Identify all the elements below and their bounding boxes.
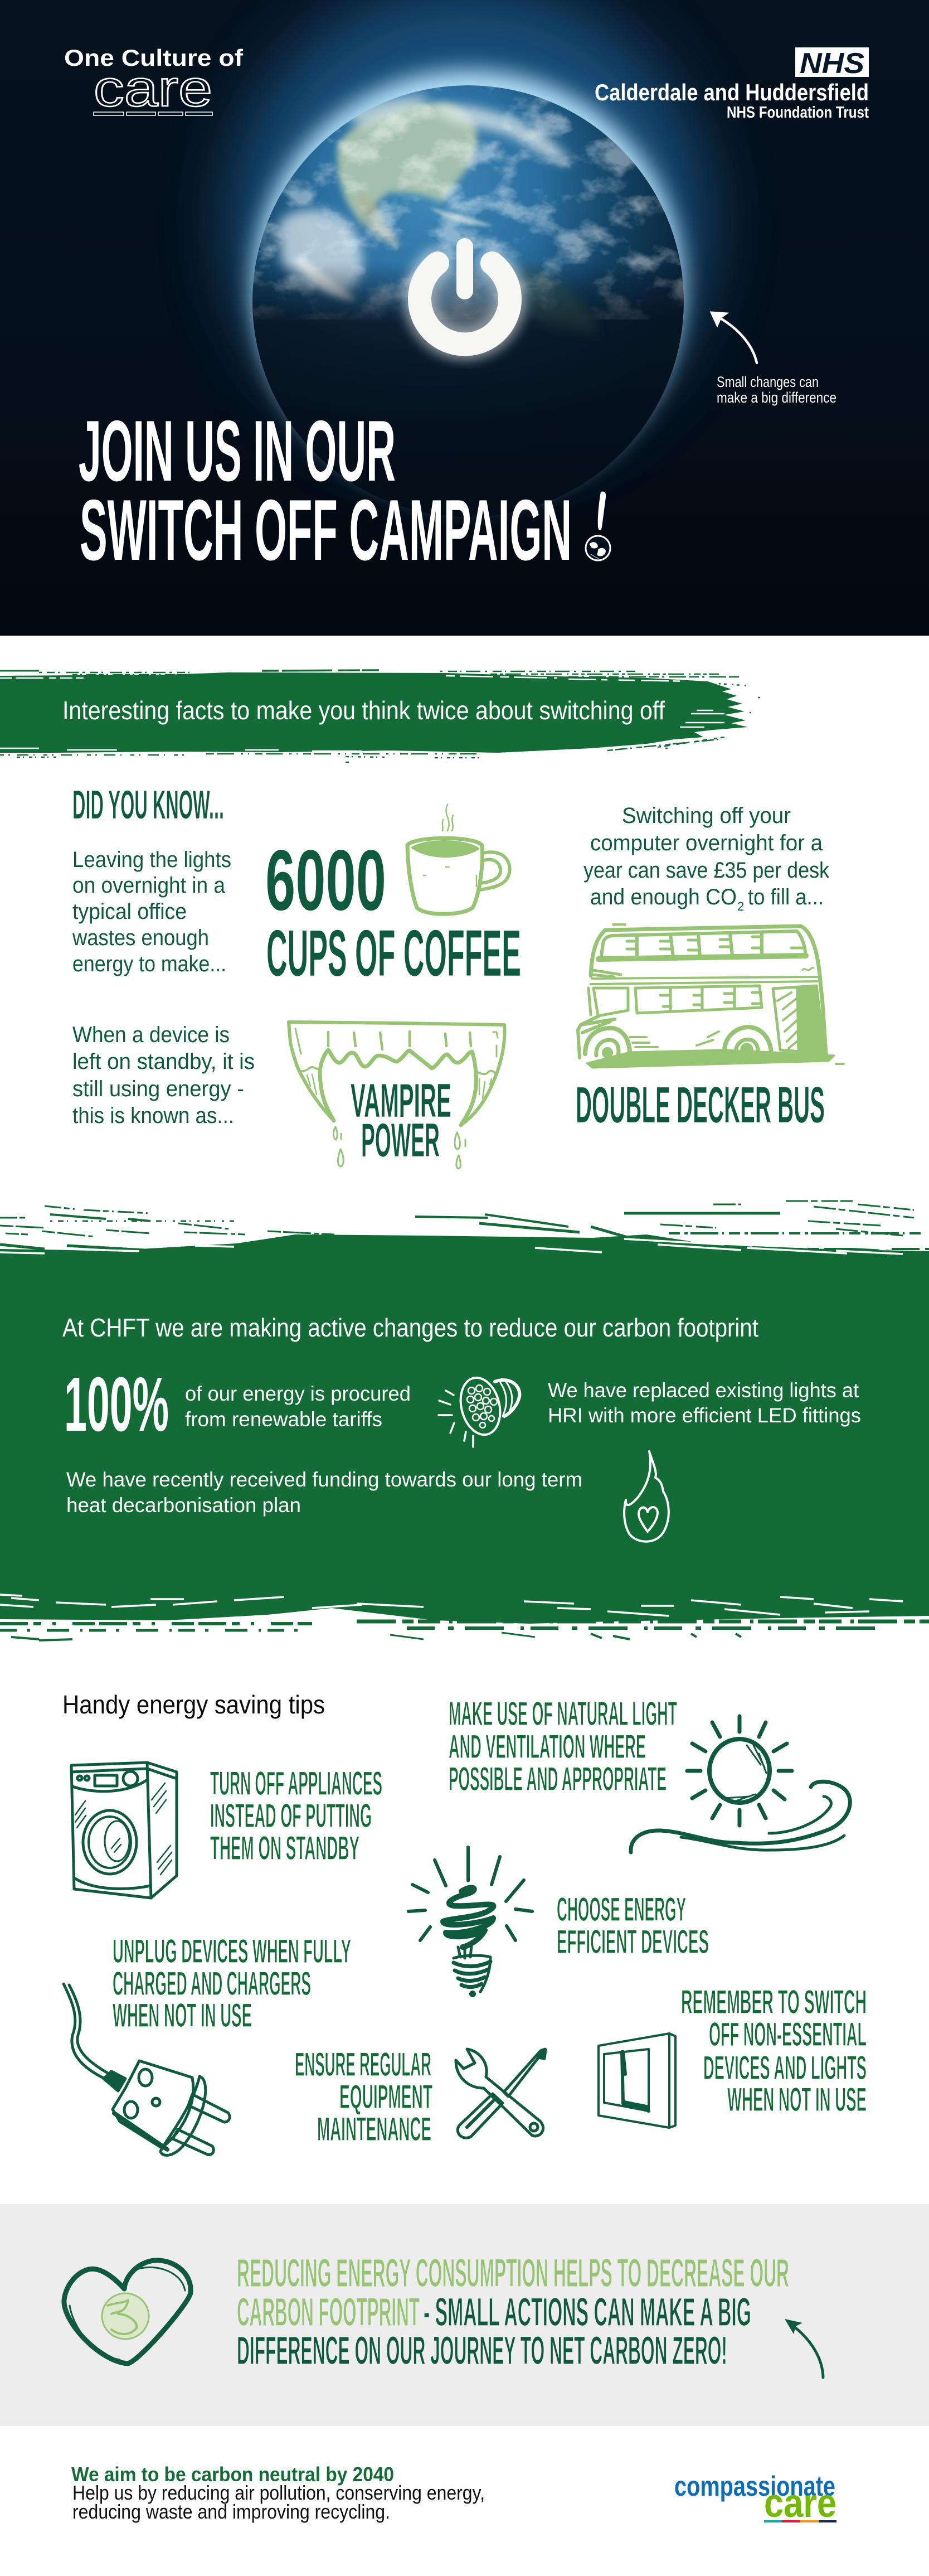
- icon: washing machine: [71, 1762, 177, 1898]
- icon: vampire fangs: [289, 1022, 504, 1169]
- stat: 6000: 6000: [265, 832, 386, 928]
- text: leaving lights: energy to make...: [72, 952, 226, 976]
- logo: NHS trust: [595, 47, 869, 122]
- arrow: small changes: [711, 312, 757, 363]
- title: JOIN US IN OUR: [79, 403, 396, 499]
- title: [79, 403, 610, 578]
- text: small changes: make a big difference: [717, 389, 836, 406]
- icon: double decker bus: [578, 924, 844, 1068]
- footer text: We aim to be carbon neutral by 2040: [71, 2463, 394, 2486]
- text: heat decarbonisation: We have recently received funding towards our long term: [66, 1468, 582, 1491]
- background haze: [228, 0, 708, 463]
- tip: maintenance: [295, 2046, 432, 2148]
- tip: energy efficient: [557, 1891, 709, 1960]
- text: leaving lights: typical office: [72, 899, 187, 924]
- footer text: [71, 2463, 485, 2523]
- brush strokes bottom: [0, 1621, 929, 1640]
- text: renewable tariffs: from renewable tariffs: [185, 1408, 382, 1431]
- tip: natural light: AND VENTILATION WHERE: [449, 1728, 646, 1765]
- heading: handy tips: Handy energy saving tips: [62, 1690, 325, 1719]
- logo: NHS trust: NHS Foundation Trust: [727, 104, 869, 122]
- text: ENSURE REGULAR: [295, 2046, 431, 2083]
- text: LED fittings: HRI with more efficient LED fittings: [548, 1404, 861, 1427]
- brush strokes top: [0, 1201, 929, 1250]
- icon: flame with heart: [624, 1451, 669, 1542]
- text: LED fittings: [548, 1379, 861, 1427]
- text: DID YOU KNOW...: [72, 783, 224, 827]
- text: standby: When a device is: [72, 1023, 230, 1047]
- text: standby: left on standby, it is: [72, 1049, 255, 1074]
- text: UNPLUG DEVICES WHEN FULLY: [113, 1933, 351, 1970]
- label: vampire power: [351, 1074, 451, 1167]
- logo: One Culture of care: One Culture of: [64, 45, 244, 71]
- text: leaving lights: wastes enough: [72, 926, 209, 950]
- heading: facts: Interesting facts to make you think twice about switching off: [62, 696, 665, 725]
- logo: NHS trust: Calderdale and Huddersfield: [595, 79, 869, 105]
- icon: heart with globe: [64, 2260, 191, 2364]
- text: leaving lights: [72, 848, 231, 976]
- text: standby: this is known as...: [72, 1103, 234, 1128]
- text: switching off: computer overnight for a: [590, 831, 823, 855]
- hero panel: [0, 0, 929, 636]
- text: switching off: [583, 803, 830, 913]
- label: vampire power: POWER: [361, 1114, 440, 1167]
- text: CUPS OF COFFEE: [266, 917, 521, 990]
- logo: compassionate care: compassionate: [674, 2471, 835, 2502]
- footer text: reducing waste and improving recycling.: [72, 2500, 390, 2523]
- earth globe: [245, 85, 691, 535]
- text: LED fittings: We have replaced existing lights at: [548, 1379, 859, 1402]
- icon: LED bulb: [439, 1373, 519, 1447]
- tip: natural light: [449, 1695, 677, 1798]
- text: switching off: Switching off your: [622, 803, 791, 828]
- tip: turn off appliances: THEM ON STANDBY: [210, 1829, 359, 1867]
- tip: energy efficient: CHOOSE ENERGY: [557, 1891, 686, 1928]
- cloud texture: [252, 85, 684, 319]
- text: leaving lights: on overnight in a: [72, 873, 226, 898]
- icon: light switch: [599, 2033, 675, 2128]
- text: leaving lights: Leaving the lights: [72, 848, 231, 872]
- logo: compassionate care: care: [764, 2481, 836, 2526]
- stat: 100%: 100%: [64, 1362, 169, 1447]
- text: standby: still using energy -: [72, 1077, 244, 1101]
- globe glow: [253, 70, 683, 501]
- icon: coffee cup: [407, 805, 510, 914]
- panel: CHFT active changes: [0, 1201, 929, 1640]
- tip: unplug: WHEN NOT IN USE: [113, 1997, 252, 2034]
- icon: energy saving bulb: [408, 1847, 532, 1997]
- text: heat decarbonisation: [66, 1468, 582, 1517]
- icon: glowing power button: [420, 245, 510, 344]
- icon: sun and wind: [631, 1716, 850, 1852]
- text: switching off: year can save £35 per desk: [583, 858, 830, 883]
- text: renewable tariffs: of our energy is procured: [185, 1382, 411, 1405]
- tip: remember to switch off: [681, 1983, 867, 2118]
- tip: turn off appliances: [210, 1765, 382, 1867]
- text: standby: [72, 1023, 255, 1128]
- text: net zero message: CARBON FOOTPRINT: [237, 2291, 420, 2335]
- text: EQUIPMENT: [339, 2078, 432, 2115]
- logo: NHS trust: NHS: [800, 47, 864, 80]
- text: heat decarbonisation: heat decarbonisation plan: [66, 1494, 301, 1517]
- icon: wrench and screwdriver: [456, 2049, 546, 2138]
- text: EFFICIENT DEVICES: [557, 1923, 709, 1960]
- tip: unplug: [113, 1933, 351, 2034]
- logo: One Culture of care: [64, 45, 244, 117]
- text: switching off: 2: [737, 899, 744, 913]
- tip: unplug: CHARGED AND CHARGERS: [113, 1965, 311, 2002]
- text: switching off: to fill a...: [748, 885, 824, 909]
- footer text: Help us by reducing air pollution, conserving energy,: [72, 2481, 485, 2504]
- panel: net zero callout: [0, 2204, 929, 2426]
- white streaks bottom: [0, 1595, 903, 1616]
- panel: interesting facts banner: [0, 670, 760, 762]
- text: net zero message: [237, 2251, 789, 2373]
- text: switching off: and enough CO: [590, 885, 737, 909]
- logo: compassionate care: [674, 2471, 836, 2526]
- text: TURN OFF APPLIANCES: [210, 1765, 382, 1802]
- text: small changes: Small changes can: [717, 374, 819, 390]
- icon: globe dot: [586, 536, 610, 560]
- text: small changes: [717, 374, 836, 406]
- icon: plug: [64, 1984, 230, 2155]
- white streaks top: [0, 1239, 903, 1254]
- heading: CHFT: At CHFT we are making active changes to reduce our carbon footprint: [62, 1313, 758, 1342]
- text: MAINTENANCE: [317, 2110, 431, 2148]
- arrow: net zero: [785, 2319, 823, 2378]
- text: renewable tariffs: [185, 1382, 411, 1431]
- text: INSTEAD OF PUTTING: [210, 1797, 372, 1834]
- logo: One Culture of care: care: [94, 60, 212, 117]
- text: VAMPIRE: [351, 1074, 451, 1127]
